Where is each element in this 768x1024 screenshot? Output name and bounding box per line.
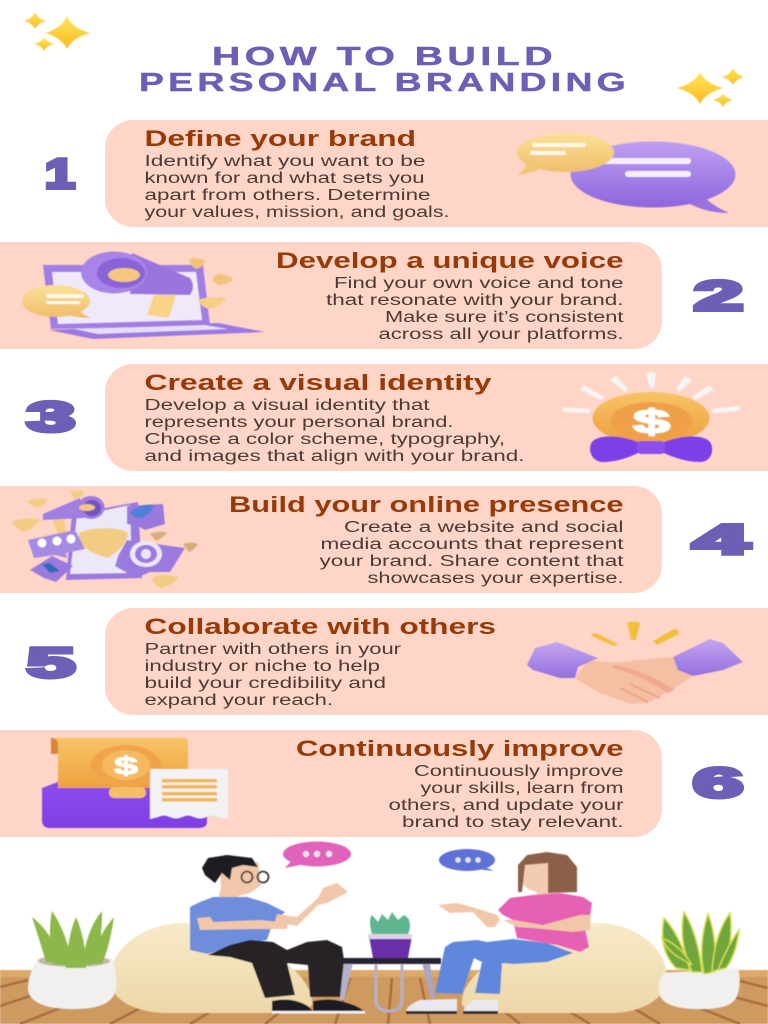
step 4 body text: showcases your expertise. [368,570,624,587]
side table with plant [340,912,441,1011]
step 1 body text: Identify what you want to be [144,153,426,170]
man's shirt [190,897,285,954]
step 3 heading: Create a visual identity [144,370,493,395]
step 4 body text: your brand. Share content that [320,553,625,570]
woman [406,852,592,1014]
title: PERSONAL BRANDING [139,67,630,97]
man's arms [197,883,348,930]
woman's shirt [498,893,592,952]
man's hair [202,855,258,883]
beanbag left [110,923,312,1013]
step 4 body text: Create a website and social [344,519,624,536]
man [190,855,365,1014]
pink speech bubble [283,842,351,868]
step 2 heading: Develop a unique voice [276,248,624,273]
step 6 body text: brand to stay relevant. [402,814,624,831]
panel: step 4 build your online presence [0,486,662,593]
number 1: 1 [45,150,75,197]
step 5 body text: Partner with others in your [144,641,401,658]
step 6 heading: Continuously improve [296,736,624,761]
step 1 body text [144,153,450,221]
icon: wallet with coin and receipt [42,738,228,828]
right plant [659,912,740,1009]
step 4 body text [320,519,625,587]
icon: coin with bow tie: $ [633,403,670,440]
icon: laptop with megaphone [22,252,265,339]
step 6 body text [388,763,624,831]
man's legs [208,940,344,998]
icon: coin with bow tie [562,372,740,462]
blue speech bubble [439,849,495,871]
icon: wallet with coin and receipt: $ [114,752,138,780]
icon: speech bubbles [517,133,736,213]
woman's neck and face [521,862,558,898]
step 1 body text: apart from others. Determine [144,187,430,204]
step 3 body text: and images that align with your brand. [144,448,524,465]
step 1 heading: Define your brand [144,126,416,151]
panel: step 1 define your brand [105,120,768,227]
icon: handshake [527,622,743,704]
panel: step 3 create a visual identity [105,364,768,471]
sparkles top right [677,68,744,107]
step 6 body text: your skills, learn from [420,780,624,797]
step 1 body text: your values, mission, and goals. [144,204,450,221]
panel: step 5 collaborate with others [105,608,768,715]
sparkles top left [24,12,90,51]
step 5 heading: Collaborate with others [144,614,496,639]
number 3: 3 [27,393,75,440]
step 2 body text: Make sure it’s consistent [385,309,624,326]
step 1 body text: known for and what sets you [144,170,424,187]
icon: phone with social media [12,490,198,588]
illustration: two people talking in a room [0,842,768,1024]
step 5 body text: expand your reach. [144,692,333,709]
man's glasses [242,872,268,882]
title: HOW TO BUILD [212,41,557,71]
step 3 body text: Choose a color scheme, typography, [144,431,505,448]
left plant [28,911,116,1009]
step 6 body text: Continuously improve [414,763,624,780]
step 2 body text: Find your own voice and tone [334,275,624,292]
man's neck and face [218,862,261,901]
woman's arms [438,903,591,932]
woman's hair [518,852,577,893]
step 3 body text: Develop a visual identity that [144,397,430,414]
step 5 body text: build your credibility and [144,675,386,692]
woman's shoes [406,999,498,1014]
man's shoes [272,1000,365,1014]
step 5 body text: industry or niche to help [144,658,380,675]
step 3 body text: represents your personal brand. [144,414,454,431]
number 6: 6 [693,759,743,806]
panel: step 6 continuously improve [0,730,662,837]
step 4 body text: media accounts that represent [320,536,624,553]
step 5 body text [144,641,401,709]
wooden floor [0,970,768,1024]
step 6 body text: others, and update your [388,797,624,814]
panel: step 2 develop a unique voice [0,242,662,349]
step 2 body text: across all your platforms. [378,326,624,343]
number 2: 2 [694,272,743,319]
woman's legs [435,939,573,994]
step 2 body text [326,275,624,343]
title [139,41,630,97]
number 5: 5 [27,639,75,686]
step 3 body text [144,397,524,465]
step 4 heading: Build your online presence [229,492,624,517]
step 2 body text: that resonate with your brand. [326,292,624,309]
beanbag right [462,923,667,1013]
number 4: 4 [693,516,751,563]
